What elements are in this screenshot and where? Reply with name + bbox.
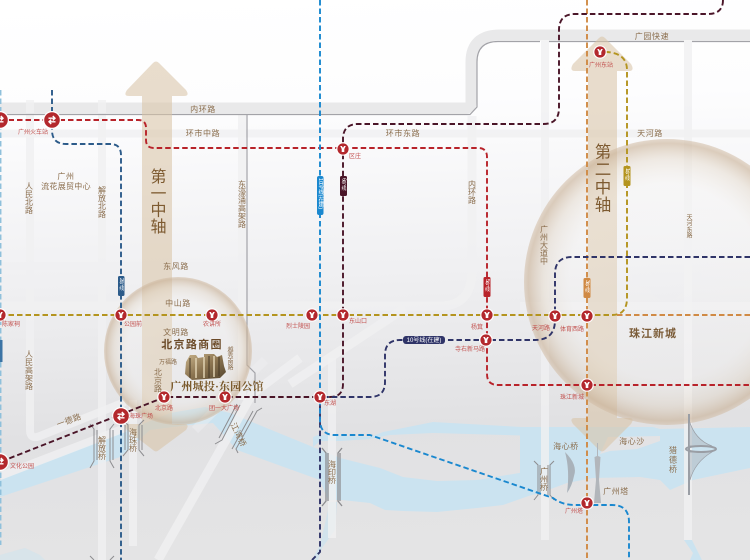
station names: 农讲所 <box>203 320 221 328</box>
tag: line 3: 3号线 <box>584 280 590 293</box>
station names: 广州东站 <box>589 61 613 69</box>
title: project name: 广州城投·东园公馆 <box>170 379 264 393</box>
station <box>114 308 128 322</box>
road labels: 万福路 <box>159 358 177 366</box>
station <box>580 378 594 392</box>
icon: Haixin bridge <box>565 452 575 493</box>
station names: 体育西路 <box>560 325 584 333</box>
road labels <box>24 31 692 496</box>
road labels: 江湾桥 <box>229 421 249 448</box>
road labels: 天河东路 <box>685 214 692 239</box>
station <box>0 308 7 322</box>
station names: 东山口 <box>349 317 367 325</box>
station names: 寺右新马路 <box>455 345 485 353</box>
station names: 区庄 <box>349 152 361 160</box>
line 1: gold <box>0 52 627 315</box>
line tags <box>0 166 630 362</box>
road labels: 猎德桥 <box>668 445 678 474</box>
station <box>580 309 594 323</box>
tag: line 10 vertical <box>317 176 324 215</box>
road labels: 一德路 <box>55 411 83 429</box>
station names: 杨箕 <box>471 323 483 331</box>
tag: line 10 vertical: 10号线(在建) <box>317 178 324 209</box>
tag: line 10 horizontal: 10号线(在建) <box>407 336 441 344</box>
line 10: navy <box>312 257 750 560</box>
road labels: 海印桥 <box>328 459 336 485</box>
line 2: steel blue <box>52 90 121 560</box>
road labels: 广州大道中 <box>540 224 548 266</box>
station names: 广州塔 <box>565 507 583 515</box>
label: Zhujiang New Town: 珠江新城 <box>629 326 677 340</box>
station names: 文化公园 <box>10 462 34 470</box>
tag: line 5 <box>484 277 490 297</box>
station <box>313 390 327 404</box>
road labels: 越秀南路 <box>226 345 233 371</box>
station names: 广州火车站 <box>18 128 48 136</box>
road labels: 人民北路 <box>24 182 34 214</box>
station names: 烈士陵园 <box>286 322 310 330</box>
road and place labels <box>24 31 692 496</box>
road labels: 广园快速 <box>635 31 669 41</box>
road labels: 海心沙 <box>619 436 645 446</box>
icon: Liede bridge <box>686 414 716 495</box>
road labels: 内环路 <box>190 104 216 114</box>
line 10: light blue <box>320 0 629 560</box>
tag: line 3 <box>584 278 590 298</box>
tag: left edge <box>0 340 2 362</box>
station <box>336 142 350 156</box>
line 6: maroon <box>0 0 723 462</box>
line 5: red <box>0 120 750 385</box>
tag: line 6 <box>340 176 347 196</box>
station <box>548 309 562 323</box>
transfer station: Cultural Park <box>0 453 9 471</box>
station <box>336 308 350 322</box>
station names: 陈家祠 <box>2 320 20 328</box>
road labels: 文明路 <box>163 327 189 337</box>
tag: line 6: 6号线 <box>340 178 346 191</box>
road labels: 解放北路 <box>98 185 106 218</box>
line 3: orange <box>587 0 750 560</box>
icon: Canton Tower <box>594 443 601 503</box>
road labels: 东濠涌高架路 <box>238 179 246 228</box>
station names: 团一大广场 <box>209 404 239 412</box>
road labels: 东风路 <box>163 261 189 271</box>
stations <box>0 45 607 510</box>
title: Beijing Road business circle: 北京路商圈 <box>161 337 223 351</box>
station <box>157 390 171 404</box>
road labels: 北京路 <box>154 368 162 393</box>
tag: line 2: 2号线 <box>118 278 124 291</box>
station names <box>2 61 613 515</box>
bubble: Beijing Road business circle <box>104 277 252 425</box>
road labels: 人民高架路 <box>24 350 34 390</box>
station names: 北京路 <box>155 404 173 412</box>
road labels: 环市东路 <box>386 128 420 138</box>
axis title: second axis: 第二中轴 <box>592 143 611 214</box>
road labels: 环市中路 <box>186 128 220 138</box>
left edge line <box>0 90 2 545</box>
station <box>480 308 494 322</box>
station <box>305 308 319 322</box>
station names: 公园前 <box>124 320 142 328</box>
station names: 东湖 <box>324 399 336 407</box>
transfer station: Guangzhou railway station <box>43 111 61 129</box>
station <box>218 390 232 404</box>
icon: project building <box>185 354 226 380</box>
transfer station <box>0 111 9 129</box>
transfer station: Haizhu Square <box>112 407 130 425</box>
tag: line 10 horizontal <box>403 336 445 344</box>
road labels: 广州塔 <box>603 486 629 496</box>
station names: 海珠广场 <box>129 412 153 420</box>
tag: line 2 <box>118 276 124 296</box>
arrow: first axis <box>125 62 188 452</box>
road labels: 广州桥 <box>540 466 548 492</box>
station <box>593 45 607 59</box>
tag: line 1: 1号线 <box>624 168 630 181</box>
bubble: Zhujiang New Town <box>524 139 750 425</box>
island: haixinsha <box>600 436 660 454</box>
road labels: 广州 <box>57 171 75 181</box>
road labels: 内环路 <box>468 179 476 204</box>
road labels: 中山路 <box>165 298 191 308</box>
station names: 珠江新城 <box>560 393 584 401</box>
bridge rails <box>90 404 554 560</box>
station <box>580 496 594 510</box>
road labels: 解放桥 <box>98 435 106 461</box>
tag: line 5: 5号线 <box>484 279 490 292</box>
road labels: 流花展贸中心 <box>41 181 91 191</box>
road labels: 海珠桥 <box>128 427 138 453</box>
station <box>205 308 219 322</box>
road labels: 海心桥 <box>553 441 579 451</box>
expressway lines <box>0 42 750 403</box>
arrow: second axis <box>571 36 633 452</box>
tag: line 1 <box>624 166 630 186</box>
axis title: first axis: 第一中轴 <box>148 168 166 235</box>
station <box>479 333 493 347</box>
station names: 天河路 <box>532 324 550 332</box>
road labels: 天河路 <box>637 128 663 138</box>
river <box>0 407 750 560</box>
